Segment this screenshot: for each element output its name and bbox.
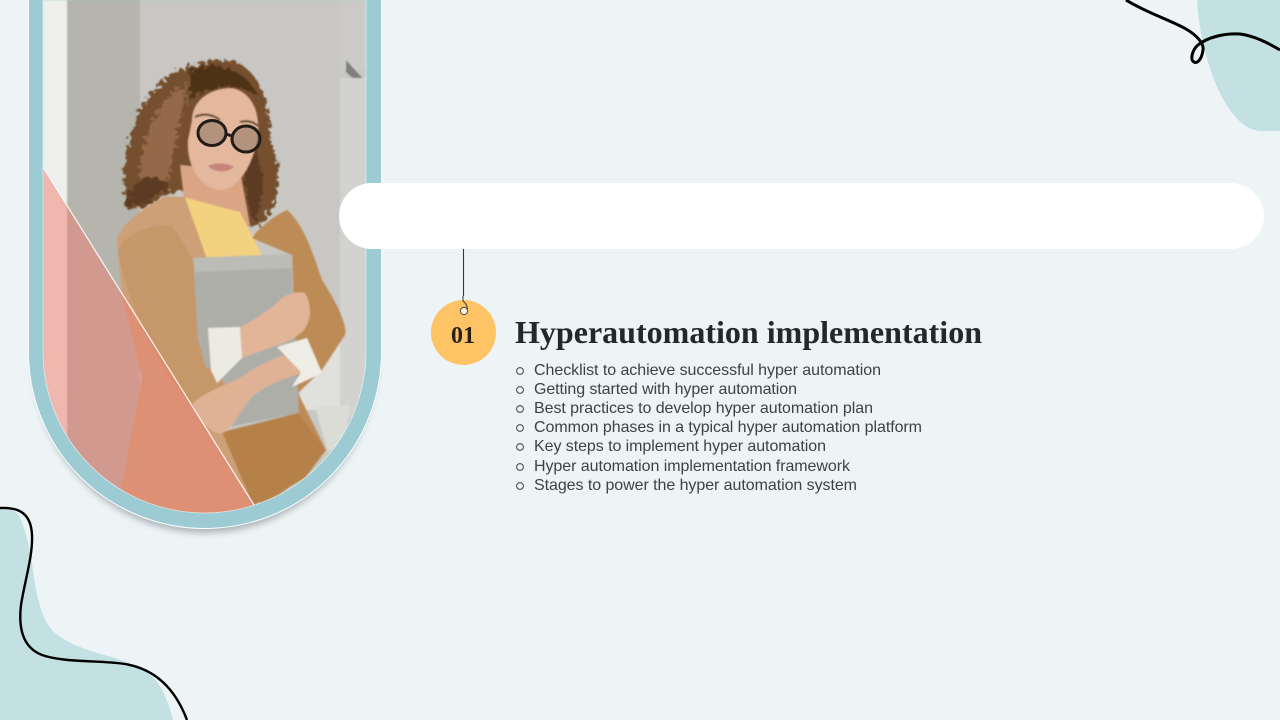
decorative squiggle: top right — [1126, 0, 1280, 62]
sleeve underside — [180, 366, 226, 405]
bullet list — [517, 362, 922, 494]
right jacket side — [252, 210, 346, 503]
lower cuff — [277, 338, 322, 387]
picture frame: arch with photo — [28, 0, 382, 533]
decorative blob: bottom left — [0, 508, 173, 720]
numbered tag — [431, 249, 496, 365]
upper cuff — [208, 327, 242, 383]
jacket body — [115, 196, 262, 515]
item 6: Hyper automation implementation framework — [534, 458, 851, 475]
item 2: Getting started with hyper automation — [534, 381, 797, 398]
lower forearm and hand — [193, 350, 303, 434]
woman: hair — [123, 60, 278, 225]
heading: Hyperautomation implementation — [515, 314, 982, 350]
trousers — [222, 413, 326, 505]
item 3: Best practices to develop hyper automation plan — [534, 400, 873, 417]
frame: white outline — [28, 0, 382, 528]
decorative blob: top right — [1197, 0, 1280, 131]
laptop top edge — [193, 254, 292, 272]
woman: neck and face — [180, 88, 258, 240]
tag number: 01 — [451, 323, 475, 349]
frame: teal arch — [28, 0, 382, 529]
woman: jacket and clothes — [115, 196, 345, 515]
frame shadow — [34, 362, 376, 533]
photo background wall — [43, 0, 367, 520]
decorative squiggle: bottom left — [0, 508, 187, 720]
item 7: Stages to power the hyper automation system — [534, 477, 857, 494]
photo: diagonal white line — [43, 167, 254, 505]
left sleeve — [118, 225, 213, 387]
tag circle — [431, 300, 496, 365]
woman: glasses — [198, 120, 260, 152]
upper forearm and hand — [240, 292, 310, 358]
item 4: Common phases in a typical hyper automation platform — [534, 419, 922, 436]
tag eyelet — [460, 307, 468, 315]
laptop — [193, 254, 299, 428]
item 5: Key steps to implement hyper automation — [534, 438, 826, 455]
white title pill — [339, 183, 1264, 249]
item 1: Checklist to achieve successful hyper automation — [534, 362, 881, 379]
tag string — [462, 249, 464, 296]
photo: pink diagonal overlay — [43, 168, 254, 512]
tag hole and hook — [463, 296, 467, 311]
frame: inner white outline — [43, 0, 366, 513]
photo: woman holding a laptop — [30, 0, 367, 530]
